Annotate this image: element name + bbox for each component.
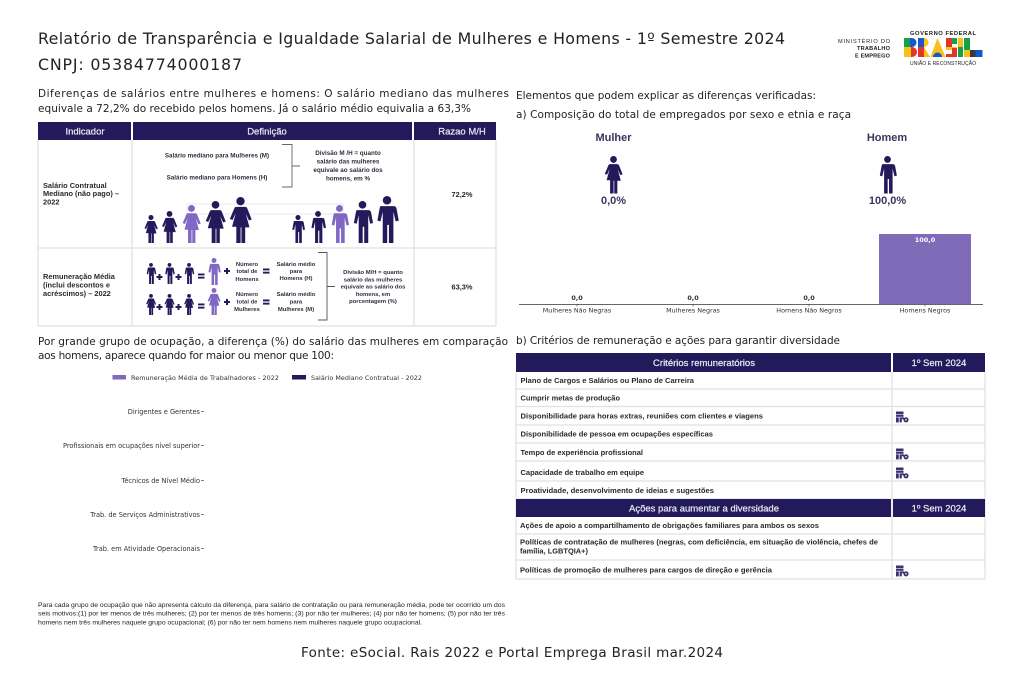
row 2 definition: salário das mulheres: [344, 278, 403, 284]
header: diversity actions: Ações para aumentar a diversidade: [629, 504, 779, 514]
row 2 definition: Número: [236, 292, 259, 298]
bar chart: workforce composition: Homens Não Negros: [776, 306, 842, 314]
logo: governo federal brasil: [904, 31, 982, 67]
row 2 definition: equivale ao salário dos: [341, 284, 406, 290]
bar chart: workforce composition: Mulheres Não Negras: [543, 306, 612, 314]
gender composition: man: Homem: [867, 132, 907, 144]
occupation chart axis labels: Dirigentes e Gerentes: [128, 408, 201, 416]
gender composition: woman: 0,0%: [601, 195, 626, 207]
occupation chart axis labels: Profissionais em ocupações nível superior: [63, 442, 200, 450]
criteria rows: Cumprir metas de produção: [520, 394, 620, 402]
footnote: seis motivos:(1) por ter menos de três mulheres; (2) por ter menos de três homens; (3) por não ter mulheres; (4) por não ter homens; (5) por não ter três: [38, 610, 506, 618]
bar chart: workforce composition: [519, 234, 983, 314]
women formula: [146, 288, 270, 315]
footnote: [38, 602, 506, 626]
gender composition: man: [867, 132, 907, 207]
row 2 definition: Homens: [235, 277, 259, 283]
bar chart: workforce composition: 0,0: [571, 294, 583, 302]
occupation group text: aos homens, aparece quando for maior ou menor que 100:: [38, 350, 334, 362]
criteria rows: Disponibilidade para horas extras, reuniões com clientes e viagens: [520, 412, 763, 420]
occupation group text: [38, 336, 508, 362]
actions rows: Políticas de promoção de mulheres para cargos de direção e gerência: [520, 566, 773, 574]
table header: Razao M/H: [438, 126, 486, 138]
heading: composition: a) Composição do total de empregados por sexo e etnia e raça: [516, 109, 851, 121]
row 2 definition: Salário médio: [277, 292, 316, 298]
bar chart: workforce composition: 100,0: [915, 236, 936, 244]
source: Fonte: eSocial. Rais 2022 e Portal Emprega Brasil mar.2024: [301, 645, 723, 661]
CNPJ: CNPJ: 05384774000187: [38, 55, 242, 74]
occupation chart axis labels: Trab. de Serviços Administrativos: [89, 511, 201, 519]
occupation group text: Por grande grupo de ocupação, a diferença (%) do salário das mulheres em comparação: [38, 336, 508, 348]
row 2 label: Remuneração Média: [43, 272, 116, 281]
actions rows: Políticas de contratação de mulheres (negras, com deficiência, em situação de violência, chefes de: [520, 538, 878, 546]
row 1 definition: homens, em %: [326, 176, 370, 182]
footnote: Para cada grupo de ocupação que não apresenta cálculo da diferença, para salário de contratação ou para remuneração média, pode ter ocorrido um dos: [38, 602, 506, 609]
icons: men by salary: [292, 196, 399, 243]
header: diversity actions: [516, 499, 985, 517]
row 1 label: [43, 181, 119, 206]
logo: governo federal brasil: GOVERNO FEDERAL: [910, 31, 976, 37]
criteria rows: Plano de Cargos e Salários ou Plano de Carreira: [520, 376, 695, 385]
criteria rows: Proatividade, desenvolvimento de ideias e sugestões: [520, 486, 714, 495]
header: criteria: 1º Sem 2024: [912, 358, 966, 369]
row 2 definition: total de: [237, 300, 258, 306]
chart legend: Remuneração Média de Trabalhadores - 2022: [131, 374, 279, 382]
row 2 definition: Mulheres (M): [278, 307, 314, 313]
criteria rows: [520, 376, 763, 495]
header: criteria: [516, 353, 985, 372]
occupation chart axis labels: [63, 408, 204, 553]
heading: criteria: b) Critérios de remuneração e ações para garantir diversidade: [516, 335, 840, 347]
criteria and actions table: [516, 353, 985, 579]
bar chart: workforce composition: Homens Negros: [900, 306, 951, 314]
table header: Indicador: [65, 126, 105, 138]
gender composition: woman: [595, 132, 632, 207]
chart legend: Salário Mediano Contratual - 2022: [311, 374, 422, 382]
row 1 definition: Salário mediano para Mulheres (M): [165, 152, 269, 160]
criteria rows: Capacidade de trabalho em equipe: [520, 468, 644, 477]
row 2 definition: Mulheres: [234, 307, 261, 313]
row 1 definition: salário das mulheres: [317, 158, 380, 166]
row 2 definition: [146, 252, 406, 320]
row 1 definition: Salário mediano para Homens (H): [167, 174, 267, 182]
row 1 definition: equivale ao salário dos: [313, 167, 383, 174]
icons: women by salary: [145, 197, 252, 243]
criteria rows: Tempo de experiência profissional: [520, 448, 643, 457]
row 1 definition: [145, 144, 399, 243]
row 1 label: Salário Contratual: [43, 181, 107, 190]
logo: governo federal brasil: UNIÃO E RECONSTRUÇÃO: [910, 60, 976, 67]
title: Relatório de Transparência e Igualdade Salarial de Mulheres e Homens - 1º Semestre 2024: [38, 29, 785, 48]
footnote: homens nem três mulheres naquele grupo ocupacional; (6) por não ter nem homens nem mulheres naquele grupo ocupacional.: [38, 620, 422, 626]
row 2 label: acréscimos) – 2022: [43, 289, 111, 298]
row 2 label: (inclui descontos e: [43, 280, 110, 290]
bar chart: workforce composition: Mulheres Negras: [666, 306, 721, 314]
logo: ministry: [838, 38, 891, 60]
row 2 ratio: 63,3%: [452, 282, 473, 292]
header: criteria: Critérios remuneratórios: [653, 358, 755, 369]
row 1 label: 2022: [43, 198, 59, 206]
men formula: [147, 258, 270, 285]
row 1 ratio: 72,2%: [452, 190, 473, 199]
heading: explaining elements: Elementos que podem explicar as diferenças verificadas:: [516, 90, 816, 102]
row 2 definition: porcentagem (%): [349, 299, 397, 305]
row 2 definition: Homens (H): [279, 276, 313, 282]
bar chart: workforce composition: 0,0: [803, 294, 815, 302]
row 1 label: Mediano (não pago) –: [43, 189, 119, 198]
logo: ministry: TRABALHO: [857, 46, 891, 52]
row 2 definition: para: [290, 269, 303, 275]
icon: checkmark rows: [896, 412, 909, 576]
chart legend: [112, 374, 422, 382]
indicator table: [38, 122, 496, 326]
row 2 definition: para: [290, 300, 303, 306]
intro text: salary differences: Diferenças de salários entre mulheres e homens: O salário mediano das mulheres: [38, 88, 509, 100]
row 2 label: [43, 272, 116, 298]
occupation chart axis labels: Trab. em Atividade Operacionais: [92, 545, 201, 553]
row 2 definition: homens, em: [356, 292, 390, 298]
row 2 definition: total de: [237, 269, 258, 275]
actions rows: [520, 521, 878, 574]
intro text: salary differences: equivale a 72,2% do recebido pelos homens. Já o salário médio equivalia a 63,3%: [38, 103, 471, 115]
actions rows: Ações de apoio a compartilhamento de obrigações familiares para ambos os sexos: [520, 521, 819, 530]
occupation chart axis labels: Técnicos de Nível Médio: [120, 477, 200, 485]
criteria rows: Disponibilidade de pessoa em ocupações específicas: [520, 430, 713, 438]
header: diversity actions: 1º Sem 2024: [912, 504, 966, 514]
row 2 definition: Divisão M/H = quanto: [343, 270, 403, 276]
row 1 definition: Divisão M /H = quanto: [315, 150, 381, 157]
table header: [38, 122, 496, 140]
gender composition: man: 100,0%: [869, 195, 906, 207]
gender composition: woman: Mulher: [595, 132, 632, 144]
logo: ministry: MINISTÉRIO DO: [838, 38, 891, 45]
row 2 definition: Número: [236, 262, 259, 268]
bar chart: workforce composition: 0,0: [687, 294, 699, 302]
table header: Definição: [247, 126, 287, 138]
intro text: salary differences: [38, 88, 509, 115]
actions rows: família, LGBTQIA+): [520, 546, 589, 556]
logo: ministry: E EMPREGO: [855, 54, 891, 60]
row 2 definition: Salário médio: [277, 262, 316, 268]
